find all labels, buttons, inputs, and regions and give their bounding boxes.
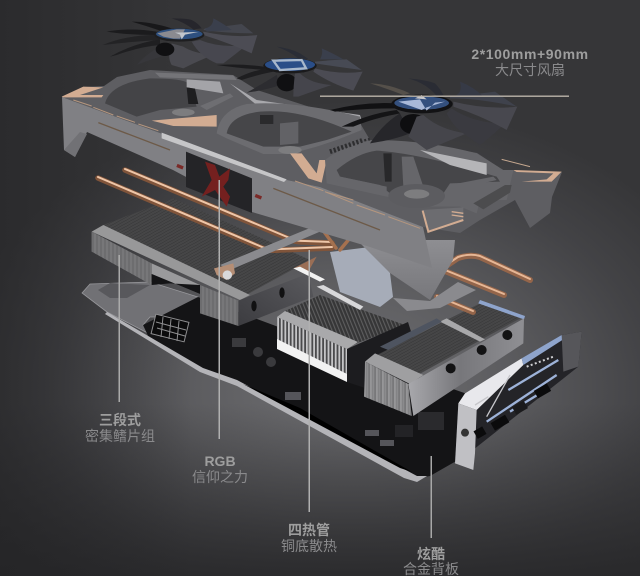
shroud front face (62, 97, 432, 268)
label: backplate (403, 546, 459, 576)
under-shroud plate, blue-grey (330, 247, 393, 307)
heatsink: centre fin stack (277, 295, 420, 388)
label: fans: 2*100mm+90mm (471, 46, 589, 62)
label: heat pipes (281, 522, 337, 554)
red X logo panel (186, 152, 252, 213)
label: RGB: 信仰之力 (192, 469, 248, 485)
label: RGB (192, 453, 248, 485)
shroud details, right half (325, 140, 562, 233)
pipe: right middle (436, 271, 504, 295)
leader line: heat pipes (308, 250, 310, 512)
power connector (151, 314, 189, 342)
label: backplate: 炫酷 (417, 546, 445, 562)
pipe: right lower (437, 297, 473, 312)
leader line: RGB (218, 180, 220, 439)
label: heat pipes: 铜底散热 (281, 538, 337, 554)
leader line: fans (320, 96, 569, 97)
contact plate and mounting bar (214, 227, 363, 310)
copper heat pipes (98, 169, 530, 312)
label: heat pipes: 四热管 (288, 522, 330, 538)
circuit board (143, 297, 472, 478)
fan: right (330, 78, 517, 150)
label: fin stack (85, 412, 155, 444)
heatsink: left three-section fin stack (92, 198, 313, 326)
label: RGB: RGB (204, 453, 236, 469)
pipe: bundle bend (322, 229, 350, 250)
label: fin stack: 密集鳍片组 (85, 428, 155, 444)
shroud top surface (62, 70, 562, 233)
fan shroud (62, 70, 562, 268)
fan: left (103, 18, 257, 68)
heatsink: right fin stack (364, 300, 525, 416)
label: fans: 大尺寸风扇 (495, 62, 565, 78)
graphics card circuit board (82, 282, 472, 482)
pipe: long left front (98, 178, 332, 250)
leader line: backplate (430, 456, 432, 538)
label: fin stack: 三段式 (99, 412, 141, 428)
components (232, 338, 444, 446)
fan: centre (217, 47, 363, 97)
shroud lower block (357, 240, 476, 311)
IO bracket (455, 332, 582, 470)
backplate left section (82, 282, 200, 355)
leader line: fin stack (118, 255, 120, 402)
shroud details, left half (62, 73, 380, 230)
pipe: long left rear (125, 170, 332, 243)
pipe: right upper (440, 256, 530, 280)
label: fans (471, 46, 589, 78)
